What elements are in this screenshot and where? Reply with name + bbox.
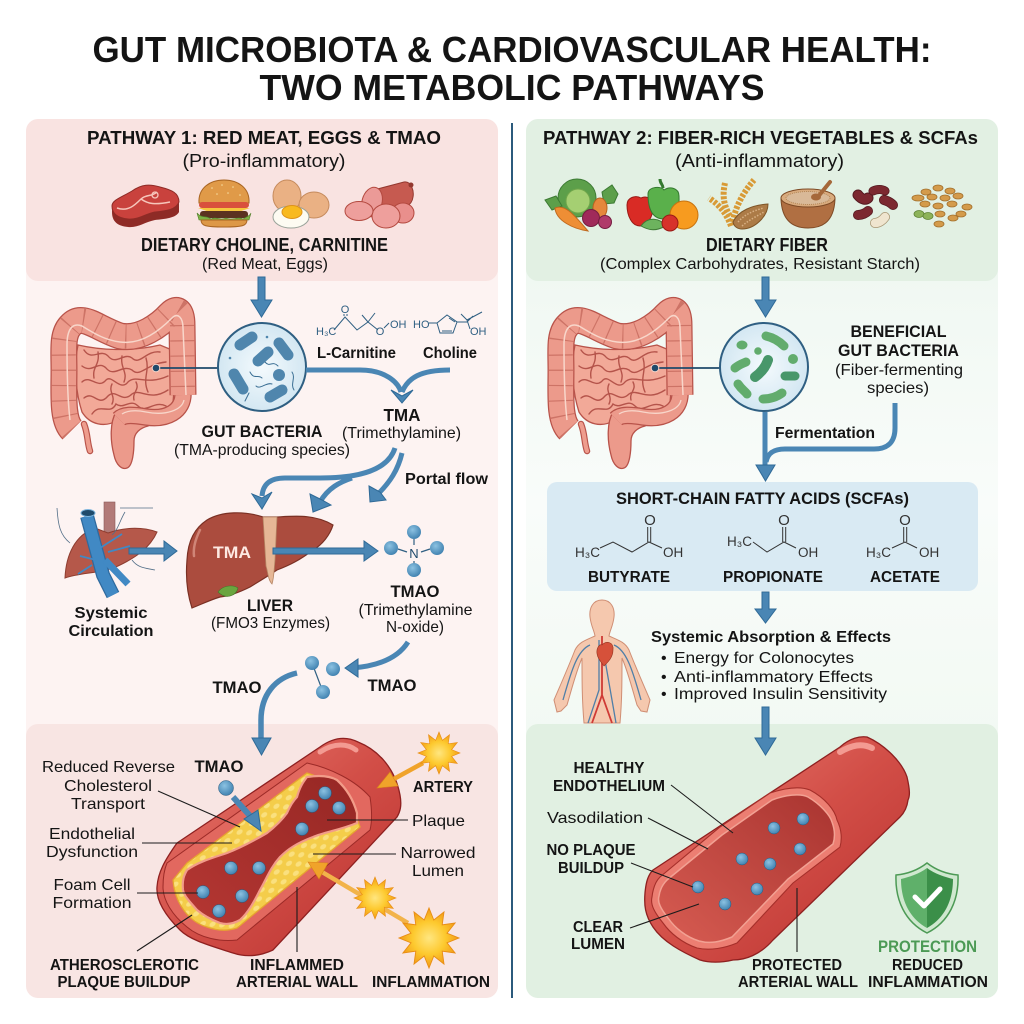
arrow: fiber to bacteria [755,277,776,317]
chemical structure: propionate: PROPIONATE [723,569,823,586]
icon: lentils [912,185,972,227]
label: TMAO left: TMAO [212,678,262,697]
icon: inflammation bursts and arrows [308,732,460,968]
chemical structure: L-carnitine: O [376,326,385,338]
icon: liver with TMA: TMA [213,543,251,562]
panel: pathway 2 header: PATHWAY 2: FIBER-RICH VEGETABLES & SCFAs [543,127,978,148]
label: protection reduced inflammation [868,938,988,991]
callout: inflamed arterial wall [236,887,358,991]
icon: kidney beans [858,190,893,223]
panel: pathway 1 header: (Pro-inflammatory) [182,150,346,171]
chemical structure: L-carnitine [316,304,407,338]
callout: foam cell formation [52,877,198,912]
label: TMAO: (Trimethylamine [358,602,473,619]
icon: human body with circulation [554,600,650,723]
chemical structure: butyrate [575,512,683,586]
callout: clear lumen: LUMEN [571,936,625,953]
chemical structure: choline: HO [413,319,430,331]
chemical structure: L-carnitine: O [341,304,350,316]
callout: no plaque buildup: NO PLAQUE [546,842,636,859]
callout: healthy endothelium: HEALTHY [574,760,645,777]
callout: reduced reverse cholesterol transport: Transport [71,796,146,813]
callout: clear lumen: CLEAR [573,919,623,936]
label: gut bacteria [174,423,350,459]
arrow: fermentation [756,403,895,481]
icon: TMAO particle and arrow [218,780,261,831]
panel: pathway 1 header: DIETARY CHOLINE, CARNITINE [141,235,388,255]
callout: atherosclerotic plaque buildup: PLAQUE BUILDUP [58,974,191,991]
callout: narrowed lumen: Lumen [412,863,464,880]
icon: vegetables [545,179,618,231]
chemical structure: L-carnitine: OH [390,319,407,331]
panel: pathway 2 header [526,119,998,281]
label: inflammation: INFLAMMATION [372,974,490,991]
label: beneficial gut bacteria: GUT BACTERIA [838,342,959,360]
callout: healthy endothelium [553,760,733,833]
arrow: SCFAs to absorption [755,592,776,623]
callout: protected arterial wall: ARTERIAL WALL [738,974,858,991]
label: liver [211,597,330,632]
callout: foam cell formation: Formation [52,895,132,912]
panel: pathway 1 [26,119,498,998]
label: choline: Choline [423,345,477,362]
callout: endothelial dysfunction: Dysfunction [46,844,138,861]
label: beneficial gut bacteria: (Fiber-fermenting [835,362,963,379]
panel: atherosclerosis [26,673,498,998]
arrow: TMAO to artery [252,673,297,755]
callout: plaque: Plaque [412,813,465,830]
icon: liver with TMA [187,513,333,608]
chemical structure: propionate [723,512,823,586]
panel background: pathway 2 middle [526,270,998,740]
label: liver: (FMO3 Enzymes) [211,615,330,632]
callout: clear lumen [571,904,699,953]
chemical structure: propionate: H₃C [727,534,752,549]
chemical structure: choline: OH [470,326,487,338]
icon: intestine [561,310,683,468]
chemical structure: butyrate: OH [663,545,683,560]
chemical structure: butyrate: BUTYRATE [588,569,670,586]
chemical structure: acetate [866,512,940,586]
icon: beneficial bacteria circle [720,323,808,411]
chemical structure: butyrate: O [644,512,656,529]
label: protection reduced inflammation: REDUCED [892,957,963,974]
chemical structure: acetate: ACETATE [870,569,940,586]
arrow: circulation to liver [129,541,177,561]
icon: bowl of grain [781,182,835,228]
callout: healthy endothelium: ENDOTHELIUM [553,778,665,795]
connector: intestine to bacteria [651,364,720,372]
label: fermentation: Fermentation [775,425,875,442]
panel: short-chain fatty acids: SHORT-CHAIN FATTY ACIDS (SCFAs) [616,490,909,508]
label: TMAO [358,582,473,636]
callout: narrowed lumen: Narrowed [400,845,476,862]
panel: pathway 1 header: (Red Meat, Eggs) [202,256,328,273]
label: artery: ARTERY [413,779,473,796]
chemical structure: choline [413,312,487,338]
label: TMAO: N-oxide) [386,619,444,636]
arrow: bacteria and choline merge to TMA [306,370,450,403]
callout: atherosclerotic plaque buildup [50,915,199,991]
panel: protected artery [526,707,998,998]
label: gut bacteria: (TMA-producing species) [174,442,350,459]
arrow: diet to bacteria [251,277,272,317]
icon: burger [197,180,251,227]
callout: inflamed arterial wall: INFLAMMED [250,957,344,974]
title: TWO METABOLIC PATHWAYS [260,67,764,108]
panel: pathway 2 header: (Anti-inflammatory) [675,150,844,171]
chemical structure: acetate: OH [919,545,939,560]
panel: short-chain fatty acids [547,482,978,591]
label: protection reduced inflammation: INFLAMMATION [868,974,988,991]
label: beneficial gut bacteria [835,323,963,397]
text block: systemic absorption and effects: • [661,669,667,686]
panel: pathway 1 header: PATHWAY 1: RED MEAT, EGGS & TMAO [87,127,441,148]
label: beneficial gut bacteria: BENEFICIAL [850,323,946,341]
panel: pathway 2 header: (Complex Carbohydrates, Resistant Starch) [600,256,920,273]
callout: protected arterial wall [738,888,858,991]
label: TMAO: TMAO [390,582,440,601]
label: systemic circulation: Circulation [68,623,154,640]
chemical structure: butyrate: H₃C [575,545,600,560]
arrows: portal flow to liver [252,448,402,512]
label: beneficial gut bacteria: species) [867,380,929,397]
label: TMA [342,405,461,442]
label: TMA: (Trimethylamine) [342,425,461,442]
text block: systemic absorption and effects: • [661,650,667,667]
icon: sausage [345,182,414,228]
label: systemic circulation: Systemic [74,605,148,622]
icon: intestine [64,310,186,468]
icon: TMAO molecule: N [409,546,419,561]
arrow: absorption to artery [755,707,776,755]
arrow: TMAO to free molecules [345,642,408,677]
callout: atherosclerotic plaque buildup: ATHEROSCLEROTIC [50,957,199,974]
callout: reduced reverse cholesterol transport: Cholesterol [64,778,152,795]
callout: reduced reverse cholesterol transport: Reduced Reverse [42,759,175,776]
chemical structure: acetate: H₃C [866,545,891,560]
callout: endothelial dysfunction [46,826,232,861]
callout: no plaque buildup: BUILDUP [558,860,624,877]
arrow: liver to TMAO [273,541,378,561]
callout: protected arterial wall: PROTECTED [752,957,842,974]
title: GUT MICROBIOTA & CARDIOVASCULAR HEALTH: [92,29,932,70]
callout: foam cell formation: Foam Cell [54,877,130,894]
icon: wheat and grain [709,180,768,229]
icon: eggs [273,180,329,228]
label: L-carnitine: L-Carnitine [317,345,396,362]
text block: systemic absorption and effects [651,629,891,703]
callout: reduced reverse cholesterol transport [42,759,240,827]
icon: TMAO molecule [384,525,444,577]
centre divider [511,123,513,998]
title [92,29,932,108]
label: TMAO on artery: TMAO [194,757,244,776]
callout: vasodilation: Vasodilation [547,810,643,827]
label: TMA: TMA [384,405,421,425]
text block: systemic absorption and effects: Improved Insulin Sensitivity [674,686,887,703]
callout: vasodilation [547,810,708,849]
callout: plaque [327,813,465,830]
text block: systemic absorption and effects: Anti-inflammatory Effects [674,669,873,686]
callout: no plaque buildup [546,842,693,887]
icon: gut bacteria circle [218,323,306,411]
icon: diseased artery [157,738,401,956]
icon: steak [112,185,179,227]
text block: systemic absorption and effects: • [661,686,667,703]
label: protection reduced inflammation: PROTECTION [878,938,977,956]
chemical structure: acetate: O [899,512,911,529]
panel: pathway 1 header [26,119,498,281]
label: liver: LIVER [247,597,293,615]
callout: inflamed arterial wall: ARTERIAL WALL [236,974,358,991]
label: portal flow: Portal flow [405,471,489,488]
callout: endothelial dysfunction: Endothelial [49,826,135,843]
text block: systemic absorption and effects: Systemic Absorption & Effects [651,629,891,646]
text block: systemic absorption and effects: Energy for Colonocytes [674,650,854,667]
chemical structure: propionate: O [778,512,790,529]
label: systemic circulation [68,605,154,640]
panel: pathway 2 header: DIETARY FIBER [706,235,828,255]
icon: free TMAO molecules [305,656,340,699]
icon: peppers and orange [627,179,698,231]
chemical structure: propionate: OH [798,545,818,560]
callout: narrowed lumen [313,845,476,880]
panel background: pathway 1 middle [26,270,498,740]
icon: protection shield [896,863,958,933]
panel: pathway 2 [526,119,998,998]
label: TMAO right: TMAO [368,676,416,695]
chemical structure: L-carnitine: H₃C [316,326,336,338]
icon: systemic circulation liver and vessels [57,502,157,595]
label: gut bacteria: GUT BACTERIA [202,423,323,441]
icon: healthy artery [645,737,909,962]
connector: intestine to bacteria [152,364,218,372]
